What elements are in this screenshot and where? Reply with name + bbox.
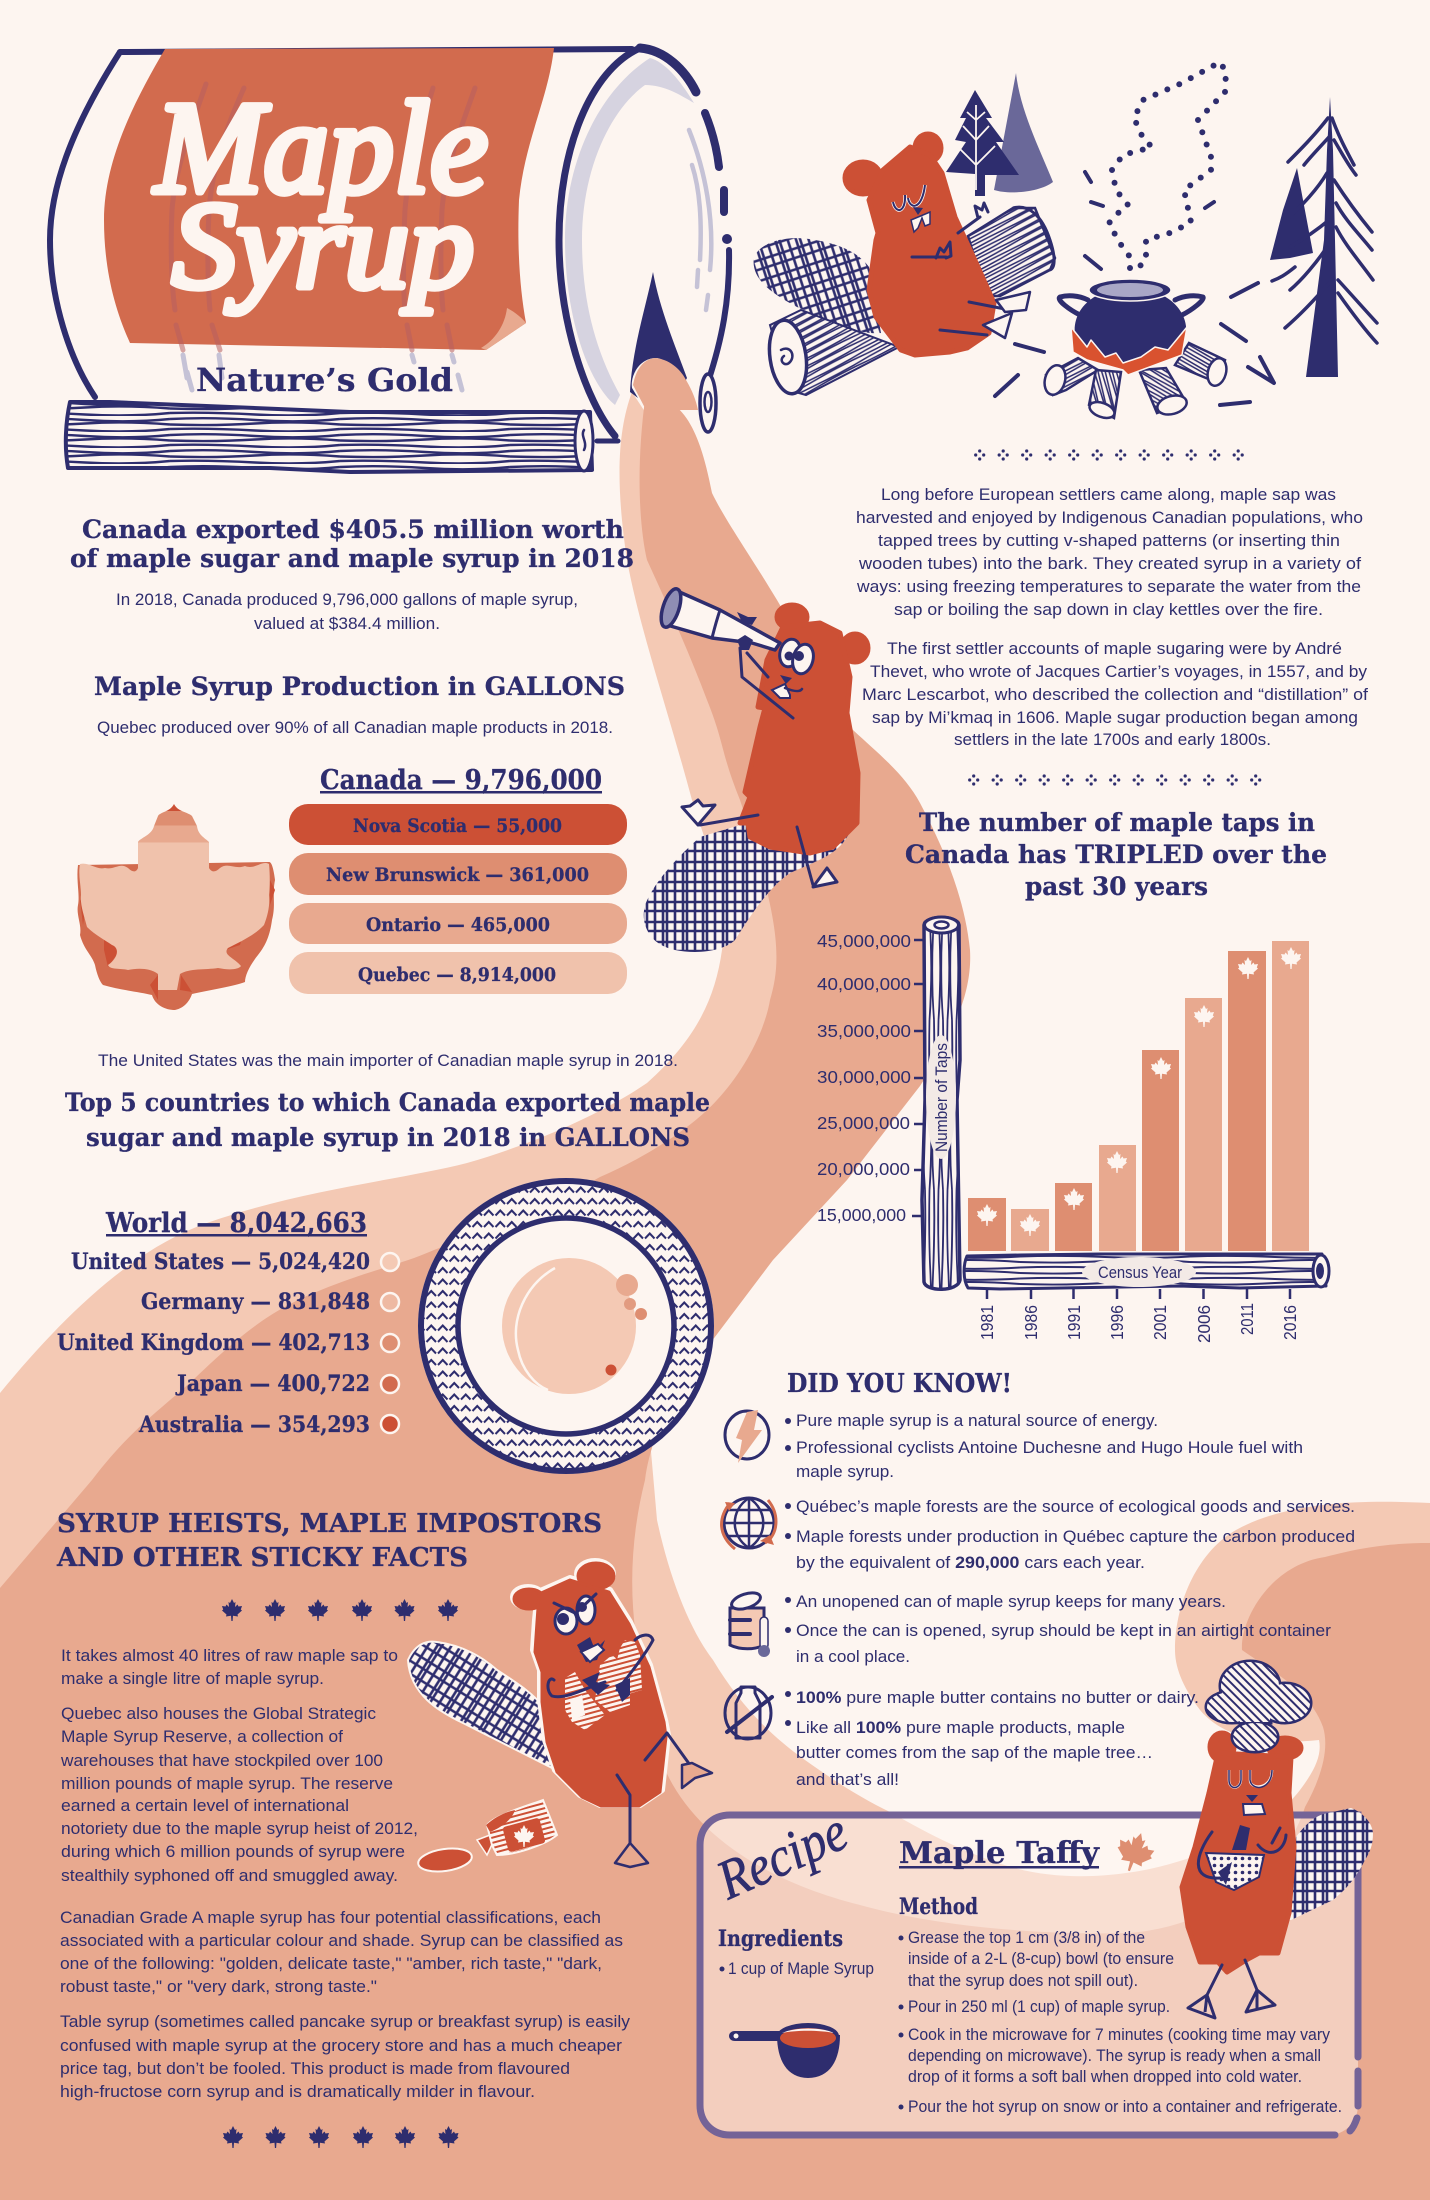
heading: top 5 countries: sugar and maple syrup in 2018 in GALLONS	[86, 1123, 690, 1152]
illustration: chef beaver face	[1229, 1770, 1272, 1815]
illustration: small pine	[946, 90, 1019, 196]
text block: heist facts: Canadian Grade A maple syrup has four potential classifications, each	[60, 1908, 601, 1927]
text block: heist facts: price tag, but don’t be fooled. This product is made from flavoured	[60, 2059, 570, 2078]
illustration: beaver face	[893, 185, 930, 232]
list: method steps: Cook in the microwave for 7 minutes (cooking time may vary	[908, 2025, 1330, 2044]
divider: lower dots	[962, 774, 1267, 786]
chart horizontal log axis: Census Year	[1098, 1263, 1182, 1282]
text block: heist facts: confused with maple syrup at the grocery store and has a much cheaper	[60, 2036, 622, 2055]
chart y axis labels: 25,000,000	[817, 1113, 910, 1133]
list: export countries: United States — 5,024,420	[71, 1249, 370, 1275]
illustration: can label	[104, 48, 554, 350]
list: did you know facts	[785, 1411, 1355, 1789]
bar: Ontario	[289, 903, 627, 944]
list: did you know facts: Once the can is opened, syrup should be kept in an airtight container	[796, 1621, 1331, 1640]
illustration: right log	[968, 207, 1055, 296]
text block: heist facts: earned a certain level of international	[61, 1796, 349, 1815]
illustration: campfire logs	[1041, 343, 1229, 421]
chart x axis years: 2016	[1280, 1305, 1300, 1340]
text block: heist facts: Table syrup (sometimes called pancake syrup or breakfast syrup) is easily	[60, 2012, 630, 2031]
icon: no dairy	[725, 1687, 772, 1739]
syrup light crescent	[600, 1440, 1430, 2000]
illustration: steam dots	[1109, 62, 1226, 268]
icon: big maple leaf	[77, 804, 275, 1010]
illustration: chef hat	[1207, 1662, 1310, 1751]
icon: measuring cup	[729, 2023, 840, 2078]
text block: heist facts: million pounds of maple syrup. The reserve	[61, 1774, 393, 1793]
heading: top 5 countries: Top 5 countries to which Canada exported maple	[65, 1088, 710, 1117]
text block: intro history: tapped trees by cutting v-shaped patterns (or inserting thin	[878, 531, 1340, 550]
illustration: angry beaver tail	[408, 1642, 560, 1772]
chart x axis years	[977, 1289, 1300, 1343]
syrup stream light layer	[0, 392, 780, 1620]
chart y axis labels: 40,000,000	[817, 974, 911, 994]
illustration: label drips	[171, 84, 475, 350]
illustration: beaver tail plaid	[754, 238, 881, 333]
subtitle: Nature’s Gold	[196, 361, 453, 399]
list: did you know facts: 100% pure maple butter contains no butter or dairy.	[796, 1688, 1199, 1707]
illustration: chef beaver tail	[1287, 1808, 1373, 1920]
illustration: cooking pot	[1059, 279, 1203, 365]
chart y axis labels: 20,000,000	[817, 1159, 910, 1179]
legend dots	[381, 1253, 399, 1433]
list: did you know facts: Professional cyclists Antoine Duchesne and Hugo Houle fuel with	[796, 1438, 1303, 1457]
list: did you know facts: maple syrup.	[796, 1462, 894, 1481]
bar: Quebec	[289, 952, 627, 994]
title	[153, 74, 488, 314]
chart y axis labels: 30,000,000	[817, 1067, 911, 1087]
recipe script heading: Recipe	[707, 1800, 857, 1912]
illustration: chef beaver	[1182, 1662, 1373, 2018]
heading: exports	[70, 515, 634, 573]
chart x axis years: 2006	[1194, 1305, 1214, 1343]
chart x axis years: 2011	[1237, 1303, 1257, 1335]
chart y axis labels: 45,000,000	[817, 931, 911, 951]
heading: exports: Canada exported $405.5 million worth	[82, 515, 624, 544]
text block: heist facts: make a single litre of maple syrup.	[61, 1669, 324, 1688]
illustration: small log end	[700, 374, 716, 432]
illustration: telescope	[657, 587, 780, 650]
text block: intro history: sap by Mi’kmaq in 1606. Maple sugar production began among	[872, 708, 1358, 727]
divider: leaf row top	[222, 1599, 458, 1621]
illustration: angry beaver outline	[513, 1561, 668, 1805]
chart horizontal log axis	[964, 1254, 1329, 1289]
text block: production value: valued at $384.4 million.	[254, 614, 440, 633]
chart y axis labels	[817, 931, 923, 1225]
text block: production value: In 2018, Canada produced 9,796,000 gallons of maple syrup,	[116, 590, 578, 609]
list: export countries: Germany — 831,848	[141, 1289, 370, 1315]
text block: heist facts: associated with a particular colour and shade. Syrup can be classified as	[60, 1931, 623, 1950]
illustration: beaver with telescope	[644, 587, 868, 952]
list: method steps: Grease the top 1 cm (3/8 in) of the	[908, 1928, 1145, 1947]
heading: top 5 countries	[65, 1088, 710, 1152]
text block: intro history: Marc Lescarbot, who described the collection and “distillation” of	[862, 685, 1368, 704]
text block: heist facts: one of the following: "golden, delicate taste," "amber, rich taste," "dark,	[60, 1954, 602, 1973]
text block: heist facts: during which 6 million pounds of syrup were	[61, 1842, 405, 1861]
illustration: beaver arms and feet	[912, 203, 1030, 338]
chart bars	[968, 941, 1309, 1251]
title: Maple	[153, 74, 488, 221]
chart y axis labels: 35,000,000	[817, 1021, 911, 1041]
icon: globe	[722, 1498, 776, 1549]
illustration: angry beaver body	[514, 1563, 666, 1806]
divider: top dots	[968, 449, 1250, 461]
title: Syrup	[172, 177, 474, 314]
text block: intro history: wooden tubes) into the bark. They created syrup in a variety of	[858, 554, 1361, 573]
list: export countries: Japan — 400,722	[175, 1371, 370, 1397]
chart x axis years: 1996	[1107, 1305, 1127, 1340]
illustration: plate with syrup	[418, 1178, 714, 1474]
chart y axis labels: 15,000,000	[817, 1205, 906, 1225]
illustration: stolen syrup bottles	[565, 1640, 642, 1730]
illustration: spilled syrup bottle	[417, 1800, 557, 1875]
illustration: gray cone tree	[994, 73, 1053, 192]
illustration: lower log	[765, 310, 899, 396]
divider: leaf row bottom	[223, 2126, 458, 2148]
text block: heist facts: warehouses that have stockpiled over 100	[60, 1751, 383, 1770]
list: did you know facts: and that’s all!	[796, 1770, 899, 1789]
text block: intro history: The first settler accounts of maple sugaring were by André	[887, 639, 1342, 658]
list: method steps: Pour the hot syrup on snow or into a container and refrigerate.	[908, 2097, 1342, 2116]
illustration: spout arrow	[630, 272, 687, 398]
text block: heist facts: Quebec also houses the Global Strategic	[61, 1704, 376, 1723]
list: export countries: United Kingdom — 402,713	[57, 1330, 370, 1356]
illustration: drips below label	[183, 355, 462, 390]
list: did you know facts: Like all 100% pure maple products, maple	[796, 1718, 1125, 1737]
text block: intro history: Thevet, who wrote of Jacques Cartier’s voyages, in 1557, and by	[870, 662, 1368, 681]
illustration: angry beaver with bottles	[408, 1561, 712, 1867]
text block: heist facts: It takes almost 40 litres of raw maple sap to	[61, 1646, 398, 1665]
heading: maple taps: The number of maple taps in	[919, 808, 1315, 837]
text block: intro history: Long before European settlers came along, maple sap was	[881, 485, 1336, 504]
list: method steps	[898, 1928, 1342, 2116]
chart x axis years: 2001	[1150, 1305, 1170, 1340]
heading: exports: of maple sugar and maple syrup in 2018	[70, 544, 634, 573]
list: method steps: Pour in 250 ml (1 cup) of maple syrup.	[908, 1997, 1170, 2016]
list: method steps: inside of a 2-L (8-cup) bowl (to ensure	[908, 1949, 1174, 1968]
panel: recipe	[700, 1800, 1358, 2135]
illustration: telescope beaver limbs	[682, 612, 837, 887]
bar: New Brunswick	[289, 853, 627, 895]
text block: heist facts: robust taste," or "very dark, strong taste."	[60, 1977, 377, 1996]
chart bar leaves	[977, 947, 1301, 1236]
heading: did you know: DID YOU KNOW!	[787, 1369, 1012, 1399]
list: export countries	[57, 1249, 370, 1438]
chart vertical log axis: Number of Taps	[932, 1043, 951, 1152]
illustration: angry beaver face	[554, 1594, 605, 1662]
list: did you know facts: by the equivalent of 290,000 cars each year.	[796, 1553, 1145, 1572]
illustration: syrup puddle	[417, 1845, 473, 1875]
illustration: chef beaver limbs	[1188, 1825, 1286, 2018]
heading: canada total: Canada — 9,796,000	[320, 765, 602, 796]
text block: production value	[116, 590, 578, 633]
illustration: tall pine	[1270, 97, 1377, 377]
list: export countries: Australia — 354,293	[138, 1412, 370, 1438]
illustration: telescope beaver tail	[644, 823, 855, 952]
chart: maple taps bar chart	[817, 917, 1329, 1343]
icon: orange maple leaf	[1112, 1828, 1158, 1876]
text block: heist facts: notoriety due to the maple syrup heist of 2012,	[61, 1819, 418, 1838]
bar: Nova Scotia: Nova Scotia — 55,000	[353, 815, 562, 837]
illustration: label fold	[481, 308, 526, 350]
text: quebec note: Quebec produced over 90% of all Canadian maple products in 2018.	[97, 718, 613, 737]
illustration: spark dashes	[995, 172, 1274, 405]
illustration: telescope beaver face	[772, 637, 817, 698]
list: method steps: depending on microwave). The syrup is ready when a small	[908, 2046, 1321, 2065]
recipe title: Maple Taffy	[899, 1836, 1101, 1871]
text block: heist facts: high-fructose corn syrup and is dramatically milder in flavour.	[60, 2082, 535, 2101]
illustration: telescope beaver body	[740, 605, 868, 853]
chart x axis years: 1986	[1021, 1305, 1041, 1340]
heading: maple taps: Canada has TRIPLED over the	[905, 840, 1327, 869]
heading: maple taps	[905, 808, 1327, 901]
icon: energy bolt	[725, 1410, 769, 1463]
chart vertical log axis	[922, 917, 960, 1289]
text block: heist facts: stealthily syphoned off and smuggled away.	[61, 1866, 398, 1885]
text block: intro history: sap or boiling the sap down in clay kettles over the fire.	[894, 600, 1323, 619]
text: main importer: The United States was the main importer of Canadian maple syrup in 2018.	[98, 1051, 678, 1070]
heading: syrup heists	[56, 1509, 602, 1573]
text block: intro history	[856, 485, 1368, 749]
list: did you know facts: Pure maple syrup is a natural source of energy.	[796, 1411, 1158, 1430]
list: did you know facts: An unopened can of maple syrup keeps for many years.	[796, 1592, 1226, 1611]
heading: world total: World — 8,042,663	[105, 1208, 367, 1239]
bar: Quebec: Quebec — 8,914,000	[358, 964, 556, 986]
bar: New Brunswick: New Brunswick — 361,000	[326, 864, 589, 886]
text block: intro history: ways: using freezing temperatures to separate the water from the	[856, 577, 1361, 596]
list: did you know facts: Québec’s maple forests are the source of ecological goods and services.	[796, 1497, 1355, 1516]
chart x axis years: 1981	[977, 1305, 997, 1340]
chart x axis years: 1991	[1064, 1305, 1084, 1340]
icon: can and thermometer	[730, 1590, 770, 1657]
heading: method: Method	[899, 1894, 978, 1920]
text: ingredient: 1 cup of Maple Syrup	[728, 1959, 874, 1978]
bar: Ontario: Ontario — 465,000	[366, 914, 550, 936]
list: method steps: that the syrup does not spill out).	[908, 1971, 1138, 1990]
list: method steps: drop of it forms a soft ball when dropped into cold water.	[908, 2067, 1302, 2086]
illustration: flames	[1071, 327, 1187, 375]
heading: syrup heists: SYRUP HEISTS, MAPLE IMPOSTORS	[57, 1509, 602, 1539]
text block: intro history: settlers in the late 1700s and early 1800s.	[954, 730, 1271, 749]
bar: Nova Scotia	[289, 804, 627, 845]
illustration: mixing bowl	[1206, 1853, 1264, 1890]
text block: intro history: harvested and enjoyed by Indigenous Canadian populations, who	[856, 508, 1363, 527]
illustration: beaver body	[845, 134, 994, 355]
illustration: syrup can with label	[50, 48, 732, 441]
text block: heist facts: Maple Syrup Reserve, a collection of	[61, 1727, 343, 1746]
list: did you know facts: in a cool place.	[796, 1647, 910, 1666]
list: did you know facts: butter comes from the sap of the maple tree…	[796, 1743, 1153, 1762]
illustration: log under can	[66, 402, 593, 472]
illustration: chef beaver body	[1182, 1733, 1301, 1972]
heading: maple taps: past 30 years	[1025, 872, 1208, 901]
list: did you know facts: Maple forests under production in Québec capture the carbon produced	[796, 1527, 1355, 1546]
heading: production: Maple Syrup Production in GALLONS	[94, 672, 625, 701]
text block: heist facts	[60, 1646, 630, 2101]
illustration: angry beaver limbs	[548, 1635, 712, 1867]
illustration: beaver sitting on logs	[754, 134, 1055, 396]
heading: syrup heists: AND OTHER STICKY FACTS	[56, 1543, 468, 1573]
heading: ingredients: Ingredients	[718, 1926, 843, 1952]
